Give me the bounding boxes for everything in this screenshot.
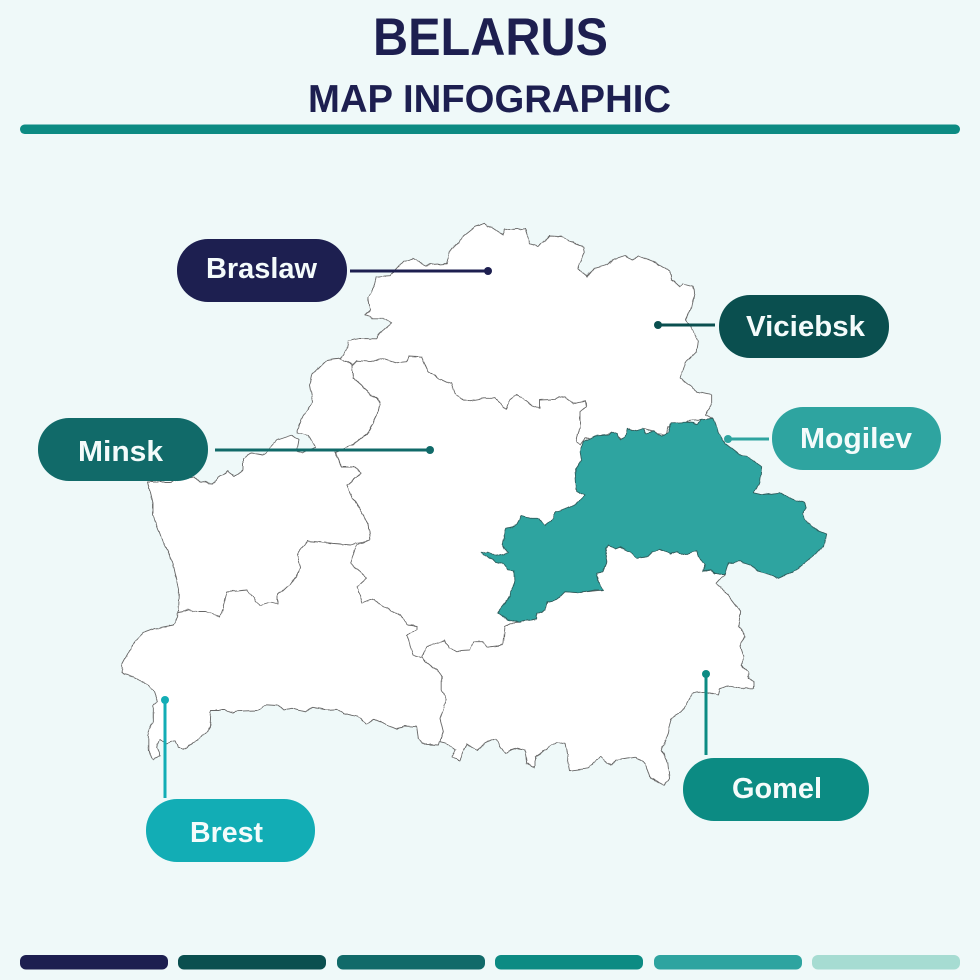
subheading: map infographic: MAP INFOGRAPHIC <box>308 78 671 121</box>
region: Minsk <box>335 350 600 665</box>
leader line: Brest <box>161 696 169 798</box>
pill: Braslaw <box>177 239 347 302</box>
callout: Viciebsk <box>654 295 889 358</box>
pill: Brest <box>146 799 315 862</box>
label: Gomel: Gomel <box>732 773 822 805</box>
region: Grodno <box>148 358 380 617</box>
pill: Minsk <box>38 418 208 481</box>
label: Mogilev: Mogilev <box>800 423 912 455</box>
label: Brest: Brest <box>190 817 263 849</box>
region: Gomel <box>422 545 754 785</box>
label: Minsk: Minsk <box>78 436 164 468</box>
callout: Mogilev <box>724 407 941 470</box>
map of Belarus <box>122 223 827 785</box>
title <box>308 8 671 121</box>
pill: Viciebsk <box>719 295 889 358</box>
leader line: Mogilev <box>724 435 769 443</box>
callout: Braslaw <box>177 239 492 302</box>
region: Viciebsk <box>340 223 713 445</box>
label: Viciebsk: Viciebsk <box>746 311 866 343</box>
region: Brest <box>122 533 457 759</box>
leader line: Braslaw <box>350 267 492 275</box>
leader line: Minsk <box>215 446 434 454</box>
label: Braslaw: Braslaw <box>206 253 317 285</box>
callout: Brest <box>146 696 315 862</box>
callout: Gomel <box>683 670 869 821</box>
leader line: Gomel <box>702 670 710 755</box>
callout: Minsk <box>38 418 434 481</box>
footer colour bars <box>20 955 960 970</box>
pill: Gomel <box>683 758 869 821</box>
header rule <box>20 124 960 134</box>
region: Mogilev highlighted <box>482 418 827 623</box>
heading: Belarus: BELARUS <box>373 8 608 67</box>
pill: Mogilev <box>772 407 941 470</box>
leader line: Viciebsk <box>654 321 715 329</box>
